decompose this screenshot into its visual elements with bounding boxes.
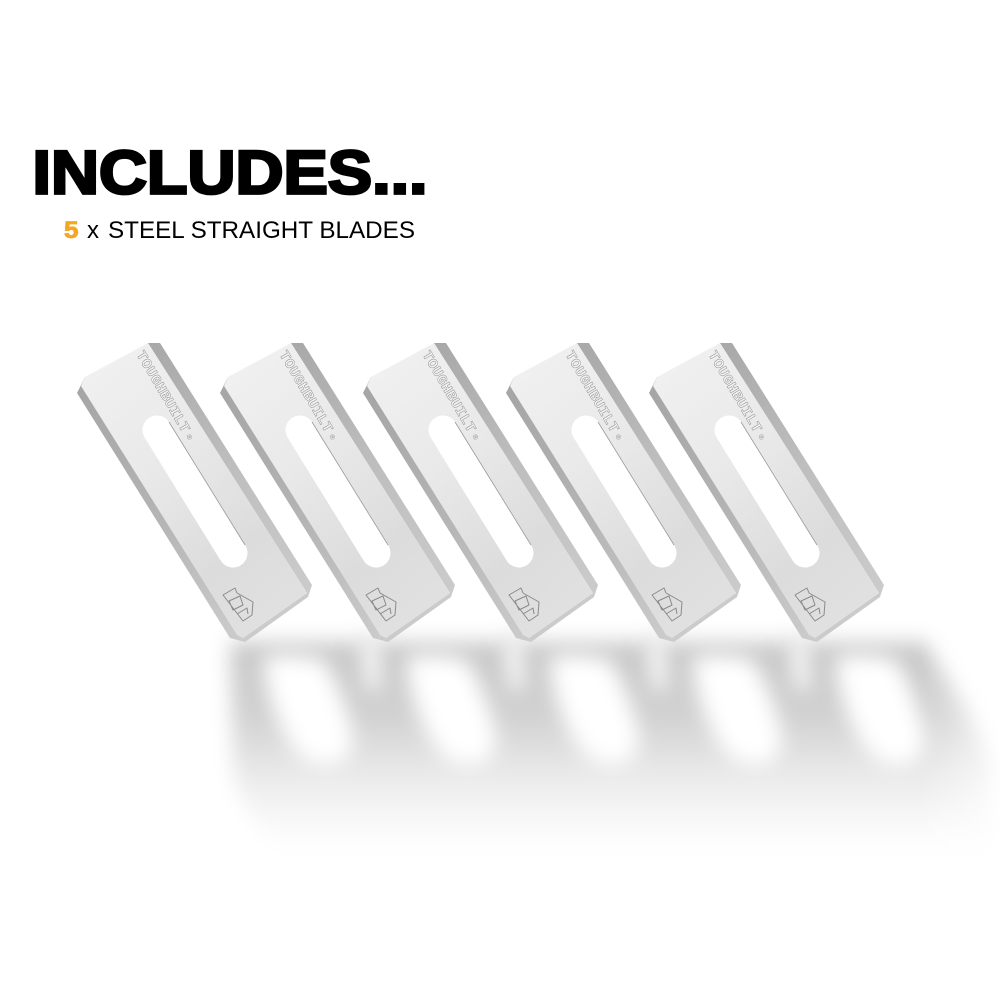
subtitle: 5 xyxy=(64,217,78,244)
blade 5: TOUGHBUILT xyxy=(704,348,764,436)
blade 3: ® xyxy=(470,433,480,442)
blade 4: ® xyxy=(613,433,623,442)
blade 2 xyxy=(220,343,455,642)
subtitle: STEEL STRAIGHT BLADES xyxy=(108,217,415,244)
blade 5: ® xyxy=(756,433,766,442)
blade 5 xyxy=(649,343,884,642)
blade 1: ® xyxy=(184,433,194,442)
blade 2: TOUGHBUILT xyxy=(275,348,335,436)
subtitle: x xyxy=(87,217,99,244)
title: INCLUDES... xyxy=(32,139,428,207)
blade 2: ® xyxy=(327,433,337,442)
blade 3 xyxy=(363,343,598,642)
blade 3: TOUGHBUILT xyxy=(418,348,478,436)
shadows under the blades xyxy=(230,630,1000,860)
blade 1 xyxy=(77,343,312,642)
blade 1: TOUGHBUILT xyxy=(132,348,192,436)
blade 4: TOUGHBUILT xyxy=(561,348,621,436)
blade 4 xyxy=(506,343,741,642)
